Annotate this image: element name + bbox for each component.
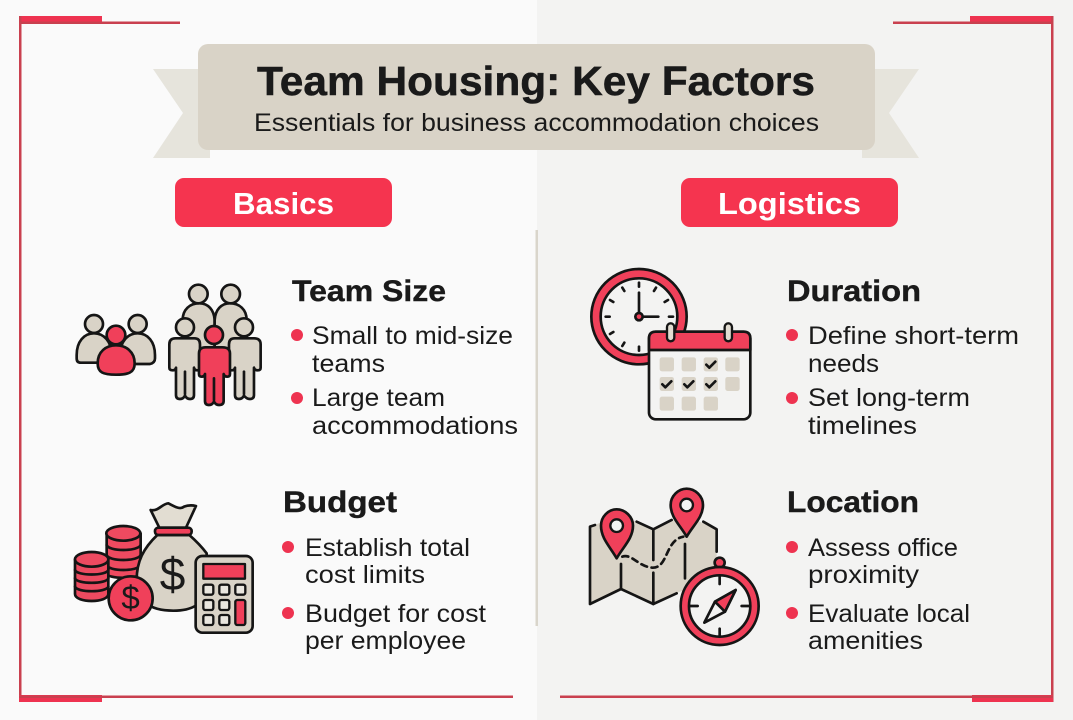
bullet: cost limits: cost limits (305, 561, 425, 589)
bullet: cost per employee: per employee (305, 627, 466, 655)
bullet: cost per employee (282, 600, 486, 655)
title banner (153, 44, 919, 158)
bullet: long-term: timelines (808, 412, 917, 440)
bullet: small teams: Small to mid-size (312, 322, 513, 350)
bullet: office proximity: proximity (808, 561, 920, 589)
duration block (786, 275, 1019, 440)
bullet: local amenities: Evaluate local (808, 600, 970, 628)
budget block (282, 486, 486, 655)
basics pill: Basics (233, 186, 334, 221)
icon: clock and calendar (591, 269, 750, 419)
heading: duration: Duration (787, 275, 921, 308)
logistics pill (681, 178, 898, 227)
subtitle: Essentials for business accommodation choices (254, 109, 819, 137)
bullet: long-term: Set long-term (808, 384, 970, 412)
bullet: local amenities: amenities (808, 627, 923, 655)
heading: location: Location (787, 486, 919, 519)
bullet: long-term (786, 384, 970, 440)
icon: map, pins and compass (590, 489, 759, 645)
bullet: large teams: Large team (312, 384, 445, 412)
ribbon tail right (862, 69, 919, 158)
icon glyph: dollar on coin: $ (121, 579, 140, 616)
location block (786, 486, 970, 655)
icon glyph: dollar on bag: $ (160, 548, 185, 600)
bullet: small teams: teams (312, 350, 385, 378)
bullet: office proximity: Assess office (808, 534, 958, 562)
bullet: large teams: accommodations (312, 412, 518, 440)
bullet: short-term: needs (808, 350, 879, 378)
logistics pill: Logistics (718, 186, 861, 221)
team size block (291, 275, 518, 440)
bullet: local amenities (786, 600, 970, 655)
banner plate (198, 44, 875, 150)
bullet: cost per employee: Budget for cost (305, 600, 486, 628)
bullet: small teams (291, 322, 513, 378)
title: Team Housing: Key Factors (257, 58, 815, 104)
ribbon tail left (153, 69, 210, 158)
bullet: cost limits (282, 534, 470, 589)
bullet: short-term: Define short-term (808, 322, 1019, 350)
icon: money bag, coins and calculator (75, 503, 253, 633)
basics pill (175, 178, 392, 227)
bullet: cost limits: Establish total (305, 534, 470, 562)
bullet: large teams (291, 384, 518, 440)
heading: budget: Budget (283, 486, 397, 519)
bullet: short-term (786, 322, 1019, 378)
heading: team size: Team Size (292, 275, 446, 308)
icon: team people (77, 285, 261, 405)
bullet: office proximity (786, 534, 958, 589)
